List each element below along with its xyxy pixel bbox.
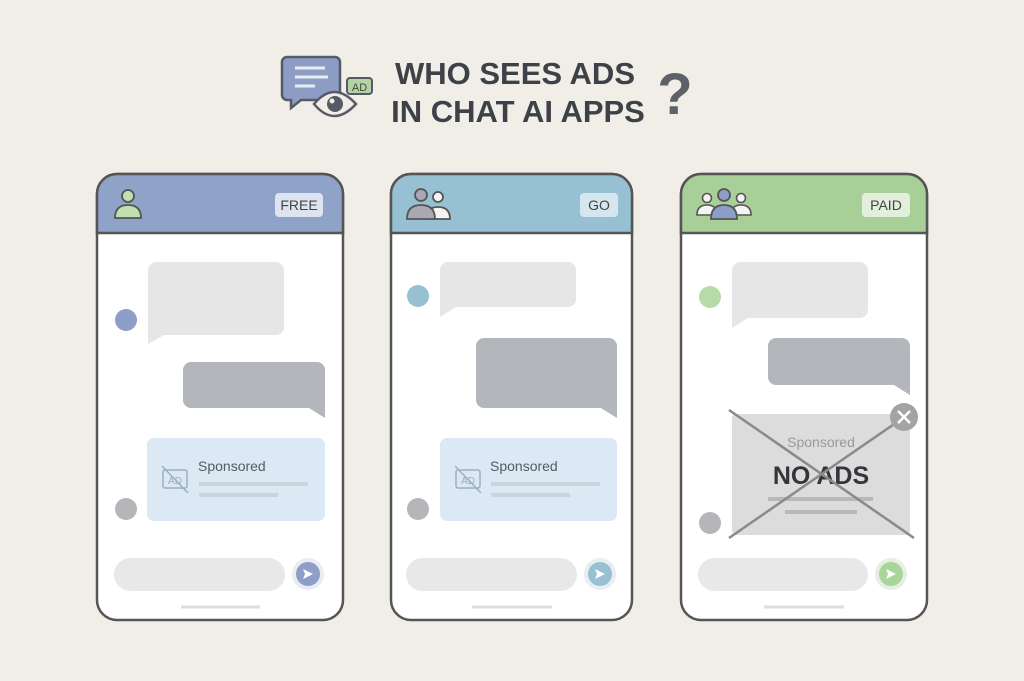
crossed-out ad card: NO ADS [773,462,869,490]
input bar [406,558,577,591]
send button [292,558,324,590]
crossed-out ad card [729,410,914,538]
sponsored ad card [440,438,617,521]
icon: chat bubble with eye and AD [282,57,372,116]
sponsored ad card: AD [168,476,182,487]
sponsored ad card [147,438,325,521]
icon: chat bubble with eye and AD: AD [352,82,367,94]
icon: single user [115,190,141,218]
input bar [698,558,868,591]
icon: two users [407,189,450,219]
crossed-out ad card: Sponsored [787,434,855,450]
icon: three users [697,189,751,219]
send button [875,558,907,590]
icon: close [890,403,918,431]
sponsored ad card: AD [461,476,475,487]
sponsored ad card: Sponsored [198,458,266,474]
send button [584,558,616,590]
badge: FREE: FREE [280,197,318,213]
panel: FREE [97,174,343,620]
icon: question mark: ? [657,62,693,127]
title group [282,56,693,129]
user message bubble [768,338,910,395]
badge: FREE [275,193,323,217]
badge: GO [580,193,618,217]
panel: PAID [681,174,927,620]
title group: IN CHAT AI APPS [391,94,645,129]
panel: GO [391,174,632,620]
badge: PAID: PAID [870,197,902,213]
sponsored ad card: Sponsored [490,458,558,474]
heading: WHO SEES ADS [395,56,635,91]
user message bubble [183,362,325,418]
user message bubble [476,338,617,418]
badge: PAID [862,193,910,217]
bot message bubble [732,262,868,328]
input bar [114,558,285,591]
badge: GO: GO [588,197,610,213]
bot message bubble [440,262,576,317]
bot message bubble [148,262,284,344]
